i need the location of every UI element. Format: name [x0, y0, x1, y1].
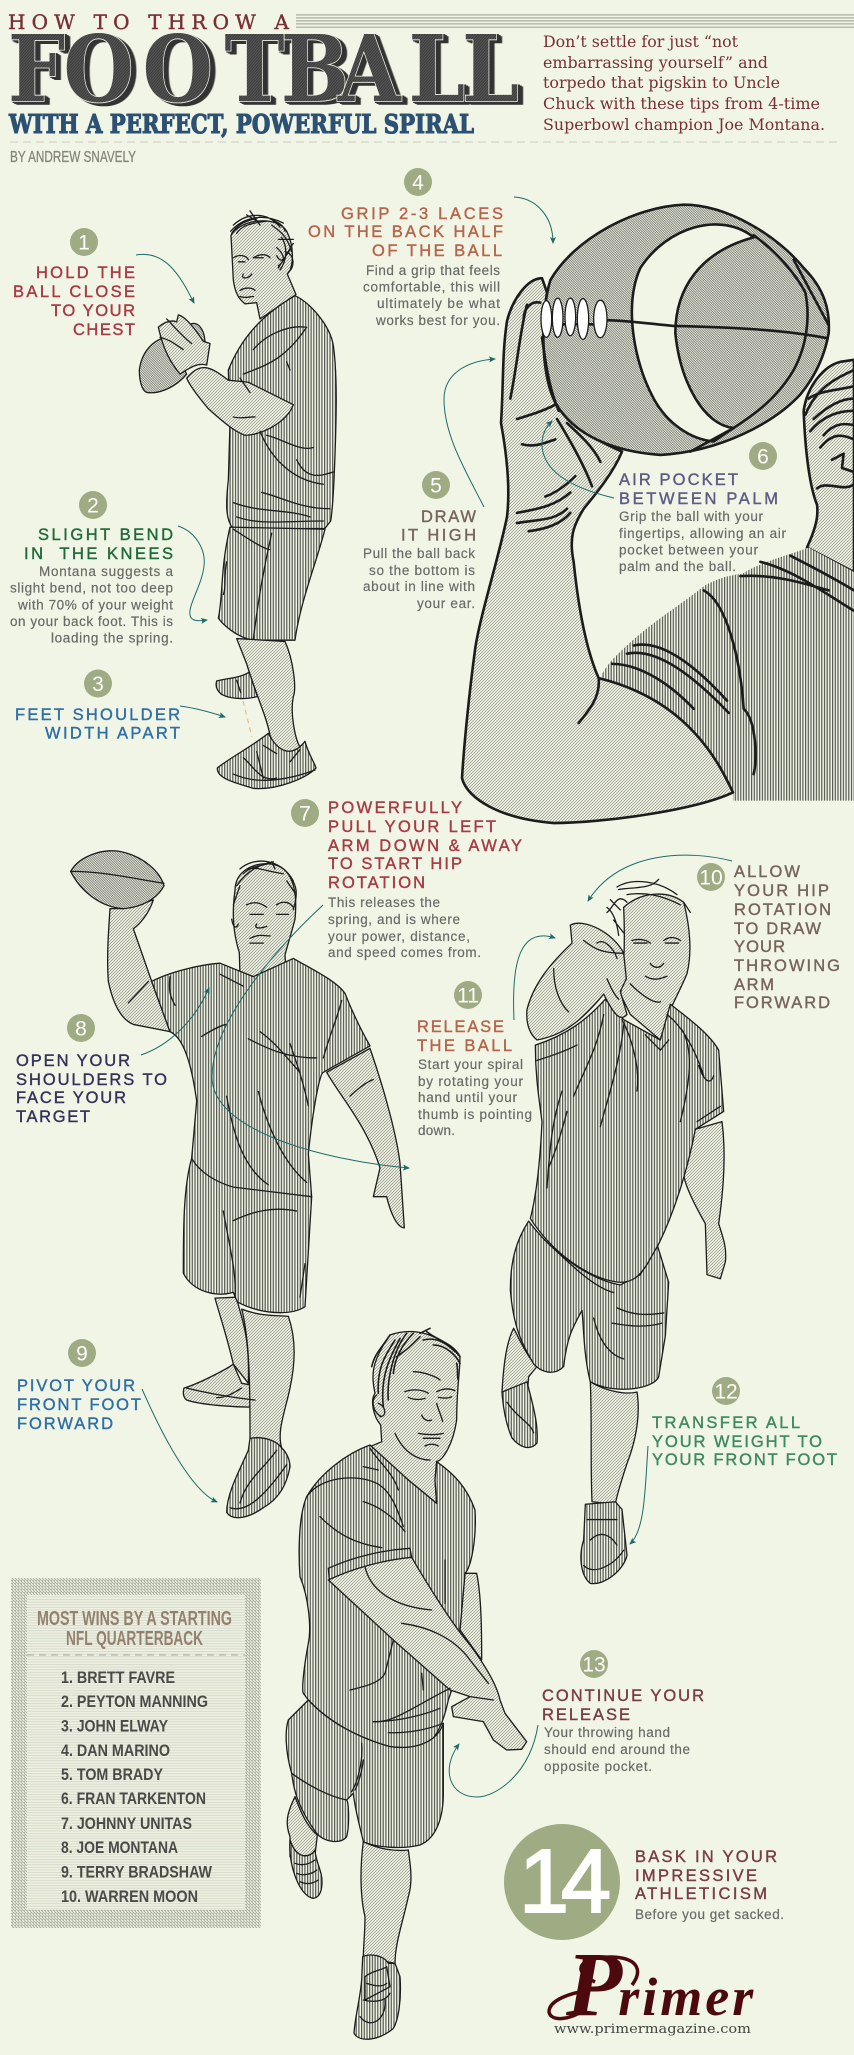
heading	[13, 264, 135, 339]
panel title	[37, 1608, 232, 1650]
heading: ATHLETICISM	[635, 1885, 767, 1903]
back leg	[287, 1797, 317, 1857]
back foot	[502, 1382, 537, 1448]
body: Pull the ball back	[363, 546, 475, 561]
panel frame	[11, 1578, 261, 1928]
detail lines	[71, 861, 373, 1509]
badge 11	[454, 981, 482, 1009]
step 13	[542, 1650, 704, 1774]
arrow 8	[141, 988, 209, 1055]
body	[363, 546, 475, 611]
white ball panel	[632, 224, 754, 441]
detail lines	[292, 1708, 443, 2023]
heading: AIR POCKET	[619, 471, 738, 489]
body: This releases the	[328, 895, 440, 910]
heading: IMPRESSIVE	[635, 1867, 757, 1885]
body: palm and the ball.	[619, 559, 736, 574]
heading: FEET SHOULDER	[15, 706, 180, 724]
head	[620, 894, 690, 1040]
left arm	[327, 1048, 404, 1228]
heading	[15, 706, 180, 742]
body: with 70% of your weight	[17, 598, 173, 612]
badge 4: 4	[412, 172, 424, 194]
body: Before you get sacked.	[635, 1907, 784, 1922]
badge 12	[712, 1377, 740, 1405]
body: Montana suggests a	[39, 564, 173, 579]
heading: HOLD THE	[36, 264, 135, 282]
foot spacing dashed line	[243, 701, 252, 737]
body: about in line with	[363, 579, 475, 594]
subtitle: WITH A PERFECT, POWERFUL SPIRAL	[8, 110, 474, 140]
intro text: Chuck with these tips from 4-time	[543, 94, 820, 113]
heading: POWERFULLY	[328, 799, 462, 817]
step 2	[10, 491, 173, 646]
ranking list: 8. JOE MONTANA	[61, 1838, 178, 1857]
heading	[542, 1687, 704, 1724]
heading: THE BALL	[417, 1037, 512, 1055]
body: slight bend, not too deep	[10, 580, 173, 596]
badge 3: 3	[92, 673, 104, 696]
heading	[16, 1052, 167, 1126]
arrow 7	[212, 905, 409, 1168]
body	[328, 895, 481, 960]
body: pocket between your	[619, 542, 758, 558]
heading: BASK IN YOUR	[635, 1848, 777, 1866]
step 7	[291, 799, 522, 960]
website: www.primermagazine.com	[554, 2022, 751, 2037]
body: so the bottom is	[369, 563, 475, 578]
back shoe	[183, 1364, 256, 1407]
front leg	[590, 1382, 638, 1504]
ranking list: 4. DAN MARINO	[61, 1741, 170, 1760]
arrow 6	[542, 421, 614, 498]
badge 7: 7	[299, 802, 311, 826]
heading: YOUR FRONT FOOT	[652, 1451, 837, 1469]
heading	[17, 1377, 141, 1433]
badge 7	[291, 799, 319, 827]
heading: PIVOT YOUR	[17, 1377, 135, 1395]
ranking list: 2. PEYTON MANNING	[61, 1692, 208, 1711]
heading	[635, 1848, 777, 1903]
arrow 12	[630, 1446, 648, 1544]
back shoe	[290, 1840, 322, 1898]
intro text: embarrassing yourself” and	[543, 53, 768, 72]
heading: IN THE KNEES	[24, 545, 173, 563]
logo swashes	[549, 1957, 637, 2019]
ball	[543, 205, 829, 455]
arm and hand	[328, 1557, 527, 1750]
left arm	[684, 1122, 726, 1279]
body: opposite pocket.	[544, 1759, 652, 1774]
heading: TARGET	[16, 1108, 90, 1126]
step 9	[17, 1339, 141, 1433]
arrow 11	[514, 936, 555, 1020]
step 6	[619, 442, 786, 574]
decorative stripes	[296, 14, 854, 28]
heading: YOUR HIP	[734, 882, 829, 900]
head	[370, 1332, 460, 1503]
fold and hair lines	[160, 211, 333, 780]
heading: TO YOUR	[51, 302, 135, 320]
intro text: Superbowl champion Joe Montana.	[543, 115, 825, 134]
header	[8, 10, 854, 166]
heading: THROWING	[734, 957, 840, 975]
heading: FRONT FOOT	[17, 1396, 141, 1414]
badge 13: 13	[582, 1654, 606, 1676]
front leg	[361, 1842, 411, 1963]
heading: ON THE BACK HALF	[308, 223, 503, 241]
back leg	[502, 1328, 537, 1397]
figure: follow through lower body	[286, 1700, 443, 2039]
hands	[158, 315, 210, 374]
shirt	[299, 1445, 475, 1748]
body: works best for you.	[375, 313, 500, 328]
byline: BY ANDREW SNAVELY	[10, 149, 136, 166]
badge 5: 5	[430, 474, 442, 498]
badge 8	[67, 1014, 95, 1042]
badge 4	[404, 168, 432, 196]
heading: DRAW	[421, 508, 476, 526]
heading: CONTINUE YOUR	[542, 1687, 704, 1705]
back arm	[460, 1573, 482, 1660]
back shoe	[216, 672, 257, 699]
back leg	[215, 1297, 249, 1383]
ball	[71, 851, 164, 909]
body	[619, 509, 786, 574]
body: Find a grip that feels	[366, 263, 500, 278]
shorts	[218, 527, 325, 640]
step 4	[308, 168, 503, 328]
head	[231, 221, 296, 319]
detail lines	[507, 879, 720, 1570]
heading: SLIGHT BEND	[38, 526, 173, 544]
figure: opening shoulders	[71, 851, 404, 1518]
head	[233, 864, 296, 981]
body	[10, 564, 173, 646]
heading	[24, 526, 173, 563]
intro text	[543, 32, 825, 134]
large badge 14: 14	[519, 1832, 611, 1932]
heading: ARM DOWN & AWAY	[328, 837, 522, 855]
heading	[417, 1018, 512, 1055]
heading	[652, 1414, 837, 1469]
leg	[237, 639, 308, 760]
title: football: FOOTBALL	[8, 16, 519, 123]
laces	[541, 298, 607, 339]
body: and speed comes from.	[328, 945, 481, 960]
detail lines	[307, 1372, 493, 1722]
arrow 1	[136, 254, 194, 303]
arrow 13	[449, 1725, 538, 1797]
body	[544, 1725, 690, 1774]
body: comfortable, this will	[363, 280, 500, 294]
panel: most wins	[11, 1578, 261, 1928]
shirt	[599, 548, 854, 801]
shorts	[183, 1158, 312, 1313]
ball	[139, 323, 205, 393]
front shoe	[354, 1955, 400, 2039]
front leg	[242, 1309, 294, 1448]
heading: TO START HIP	[328, 855, 462, 873]
heading: IT HIGH	[401, 526, 476, 544]
shorts	[286, 1700, 443, 1847]
badge 1: 1	[78, 232, 90, 254]
throwing arm and fist	[527, 923, 627, 1040]
figure: holding ball at chest	[139, 211, 336, 789]
heading: GRIP 2-3 LACES	[341, 205, 503, 223]
heading: RELEASE	[417, 1018, 504, 1036]
heading: TRANSFER ALL	[652, 1414, 800, 1432]
heading	[619, 471, 778, 508]
badge 10: 10	[699, 866, 723, 890]
body: by rotating your	[418, 1074, 524, 1089]
shirt	[152, 958, 370, 1197]
kicker: how to throw a: HOW TO THROW A	[8, 10, 290, 34]
figure: arm forward	[502, 879, 726, 1584]
body: your ear.	[417, 596, 475, 611]
ranking list: 9. TERRY BRADSHAW	[61, 1862, 213, 1882]
badge 8: 8	[75, 1018, 87, 1040]
badge 2: 2	[87, 494, 99, 518]
heading: WIDTH APART	[45, 724, 180, 742]
large badge 14	[504, 1824, 620, 1940]
badge 9: 9	[76, 1342, 88, 1366]
badge 2	[79, 491, 107, 519]
panel inner	[27, 1595, 245, 1910]
ranking list: 5. TOM BRADY	[61, 1765, 164, 1784]
badge 12: 12	[714, 1380, 738, 1404]
front shoe	[581, 1502, 627, 1584]
body: hand until your	[418, 1090, 518, 1105]
heading: ROTATION	[734, 901, 831, 919]
ranking list: 10. WARREN MOON	[61, 1887, 198, 1906]
throwing arm	[108, 900, 170, 1032]
body: ultimately be what	[377, 296, 500, 311]
step 8	[16, 1014, 167, 1126]
heading: OPEN YOUR	[16, 1052, 130, 1070]
logo: primer	[549, 1933, 756, 2037]
front shoe	[217, 733, 316, 789]
arrow 5	[444, 359, 495, 507]
badge 6: 6	[757, 446, 769, 468]
body: loading the spring.	[51, 630, 173, 646]
ranking list: 1. BRETT FAVRE	[61, 1668, 175, 1687]
step 12	[652, 1377, 837, 1469]
heading: OF THE BALL	[372, 242, 502, 260]
intro text: Don’t settle for just “not	[543, 32, 739, 51]
heading: FORWARD	[734, 994, 830, 1012]
arm	[187, 368, 293, 435]
heading: BALL CLOSE	[13, 283, 135, 301]
arrow 2	[178, 526, 207, 621]
step 1	[13, 228, 135, 339]
heading: TO DRAW	[734, 920, 821, 938]
heading: ROTATION	[328, 874, 425, 892]
step 11	[417, 981, 532, 1138]
heading: BETWEEN PALM	[619, 490, 778, 508]
head behind	[804, 360, 854, 572]
arrow 4	[514, 197, 553, 243]
badge 10	[697, 863, 725, 891]
body: Start your spiral	[418, 1057, 523, 1072]
body: thumb is pointing	[418, 1107, 532, 1122]
heading: YOUR	[734, 938, 785, 956]
shirt	[530, 999, 724, 1282]
step 5	[363, 471, 476, 611]
heading: SHOULDERS TO	[16, 1071, 167, 1089]
ranking list	[61, 1668, 213, 1906]
badge 6	[749, 442, 777, 470]
step 3	[15, 670, 180, 742]
body: Your throwing hand	[544, 1725, 670, 1740]
step 14	[504, 1824, 784, 1940]
body: on your back foot. This is	[10, 614, 173, 629]
badge 3	[84, 670, 112, 698]
intro text: torpedo that pigskin to Uncle	[543, 73, 780, 92]
seam and panel lines	[607, 235, 829, 452]
badge 11: 11	[457, 984, 479, 1008]
dashed rule	[10, 141, 837, 143]
heading: ARM	[734, 976, 774, 994]
body: your power, distance,	[328, 929, 470, 944]
heading: ALLOW	[734, 863, 800, 881]
heading: PULL YOUR LEFT	[328, 818, 496, 836]
body: Grip the ball with your	[619, 509, 764, 524]
ranking list: 3. JOHN ELWAY	[61, 1716, 169, 1736]
heading: FORWARD	[17, 1415, 113, 1433]
shorts	[510, 1221, 669, 1389]
body: down.	[418, 1123, 455, 1138]
front shoe	[227, 1438, 290, 1518]
body: spring, and is where	[328, 912, 460, 927]
panel dashed rule	[27, 1654, 245, 1656]
heading	[328, 799, 522, 892]
figure: big hand gripping ball	[462, 205, 854, 823]
arrows	[136, 197, 732, 1797]
heading: RELEASE	[542, 1706, 630, 1724]
ranking list: 6. FRAN TARKENTON	[61, 1789, 206, 1808]
logo wordmark: rimer	[618, 1967, 756, 2027]
heading	[308, 205, 503, 260]
body: should end around the	[544, 1742, 690, 1757]
heading	[734, 863, 840, 1012]
ranking list: 7. JOHNNY UNITAS	[61, 1814, 192, 1833]
heading: CHEST	[73, 321, 135, 339]
logo wordmark: P	[565, 1933, 623, 2035]
step 10	[697, 863, 840, 1012]
body	[363, 263, 500, 328]
heading: YOUR WEIGHT TO	[652, 1433, 822, 1451]
arrow 10	[588, 855, 732, 901]
arrow 9	[142, 1389, 217, 1502]
shirt	[227, 296, 336, 529]
heading	[401, 508, 476, 544]
panel title: NFL QUARTERBACK	[66, 1628, 203, 1650]
finger and arm lines	[510, 302, 854, 774]
body	[418, 1057, 532, 1138]
badge 13	[580, 1650, 608, 1678]
arm	[462, 278, 733, 823]
figure: follow through	[299, 1328, 527, 1750]
panel title: MOST WINS BY A STARTING	[37, 1608, 232, 1630]
body: fingertips, allowing an air	[619, 526, 786, 541]
hair strokes	[372, 1328, 460, 1407]
heading: FACE YOUR	[16, 1089, 126, 1107]
arrow 3	[180, 706, 225, 717]
